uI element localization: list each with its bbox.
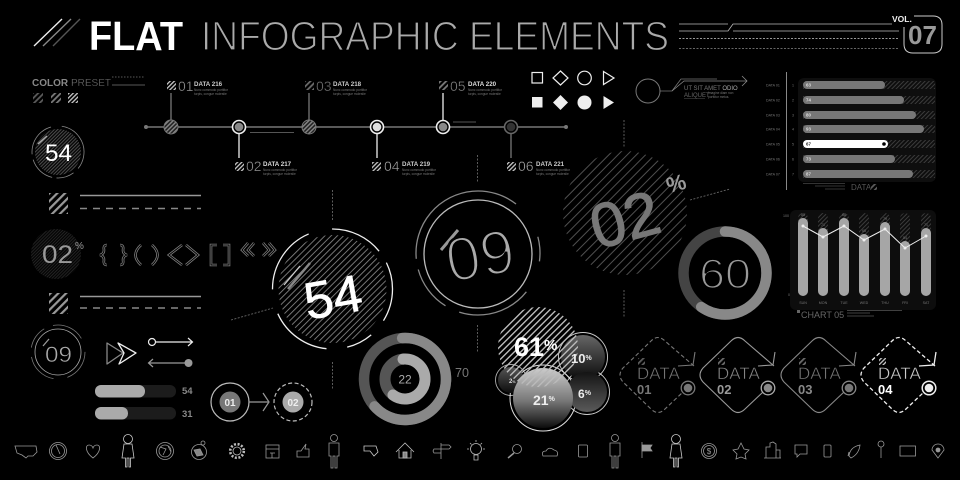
icon: signpost	[433, 443, 451, 459]
icon: magnifier	[508, 444, 522, 458]
timeline label 03	[305, 78, 368, 96]
timeline label 02: Nunc commodo porttitor	[263, 168, 298, 172]
color preset: PRESET	[71, 78, 111, 89]
horizontal bar chart: 4	[792, 128, 794, 132]
timeline label 01: 01	[178, 78, 194, 94]
icon: cloud	[542, 448, 558, 456]
bubble chart: 6	[578, 387, 585, 401]
data card 01	[620, 338, 695, 412]
step flow 01 to 02: 01	[224, 398, 236, 409]
column chart: SUN	[799, 301, 807, 305]
timeline label 04: 04	[384, 158, 400, 174]
data card 01: DATA	[637, 364, 680, 383]
play icon	[107, 343, 136, 364]
icon: map marker	[932, 444, 944, 458]
volume badge	[679, 14, 942, 53]
icon: globe with pin	[192, 441, 206, 460]
horizontal bar chart: 80	[806, 112, 811, 118]
progress bars: 31	[182, 409, 193, 420]
horizontal bar chart: DATA 01	[766, 84, 780, 88]
progress bars: 54	[182, 386, 193, 397]
timeline label 03: DATA 218	[333, 81, 362, 88]
bubble chart: %	[585, 390, 592, 397]
timeline label 03: turpis, congue molestie	[333, 92, 366, 96]
icon: usa map	[15, 446, 37, 458]
title: FLAT	[89, 13, 183, 59]
icon: building	[266, 445, 279, 458]
badge: 02 percent small: 02	[42, 241, 73, 269]
callout arrow: Imagine diam non	[708, 91, 734, 95]
column chart: 100	[783, 214, 789, 218]
icon: heart	[86, 445, 100, 458]
icon: dollar coin	[702, 444, 716, 458]
icon: phone	[824, 445, 831, 457]
timeline label 04: DATA 219	[402, 161, 431, 168]
title: INFOGRAPHIC ELEMENTS	[201, 13, 669, 59]
icon: star	[733, 443, 749, 459]
column chart: FRI	[902, 301, 908, 305]
bubble chart: 61	[514, 332, 544, 362]
icon: clock	[50, 442, 66, 460]
divider with hatch 1	[49, 193, 201, 214]
timeline label 06: 06	[518, 158, 534, 174]
data card 03	[781, 338, 856, 412]
callout arrow	[636, 76, 747, 103]
data card 02: 02	[717, 382, 731, 397]
horizontal bar chart: 67	[806, 142, 811, 146]
data card 02: DATA	[717, 364, 760, 383]
timeline label 01: DATA 216	[194, 81, 223, 88]
shape set	[532, 71, 614, 110]
color preset	[32, 77, 145, 103]
timeline label 03: Nunc commodo porttitor	[333, 88, 368, 92]
callout arrow: porttitor metus.	[708, 95, 729, 99]
icon: man	[329, 434, 339, 468]
icon: gear	[230, 444, 244, 458]
data card 04: DATA	[878, 364, 921, 383]
horizontal bar chart: 87	[806, 172, 811, 176]
volume badge: 07	[908, 20, 937, 50]
data card 01: 01	[637, 382, 651, 397]
badge: 02 percent small: %	[75, 241, 84, 252]
donut: 60: 60	[699, 250, 751, 297]
column chart: 85	[801, 213, 805, 217]
column chart: THU	[881, 301, 889, 305]
big badge: 02 percent: %	[663, 169, 689, 198]
double donut: 22 and 70	[361, 335, 469, 423]
icon: house	[396, 443, 414, 458]
column chart: 0	[788, 293, 790, 297]
horizontal bar chart: 93	[806, 126, 811, 132]
timeline label 01: Nunc commodo porttitor	[194, 88, 229, 92]
timeline label 06: Nunc commodo porttitor	[536, 168, 571, 172]
icon: speech bubble	[795, 445, 807, 457]
step flow 01 to 02	[211, 383, 312, 421]
double donut: 22 and 70: 70	[455, 366, 469, 380]
timeline label 03: 03	[316, 78, 332, 94]
big badge: 54: 54	[300, 264, 367, 332]
timeline label 05: Nunc commodo porttitor	[468, 88, 503, 92]
big badge: 02 percent	[563, 151, 689, 275]
step flow 01 to 02: 02	[287, 398, 299, 409]
badge: 54 small: 54	[45, 140, 72, 167]
horizontal bar chart: 7	[792, 172, 794, 176]
column chart: WED	[860, 301, 869, 305]
horizontal bar chart: DATA 05	[766, 142, 780, 146]
bubble chart: %	[585, 355, 592, 362]
icon: woman 2	[670, 434, 682, 467]
icon: tablet	[578, 445, 588, 457]
arrow pair	[148, 338, 192, 367]
volume badge: VOL.	[892, 14, 912, 24]
icon: pin	[878, 441, 884, 458]
column chart: SAT	[923, 301, 930, 305]
icon: dollar coin: $	[707, 447, 712, 456]
badge: 09 small	[27, 321, 89, 383]
icon: globe	[156, 442, 174, 460]
bubble chart: 10	[571, 351, 585, 366]
bubble chart: %	[544, 337, 557, 354]
title slashes	[34, 19, 80, 46]
big badge: 02 percent: 02	[583, 178, 667, 263]
column chart: TUE	[840, 301, 848, 305]
dashed guides	[231, 120, 730, 390]
timeline label 06	[507, 158, 571, 176]
icon: rocket	[848, 445, 860, 458]
column chart: 71	[924, 223, 928, 227]
timeline label 06: turpis, congue molestie	[536, 172, 569, 176]
timeline label 05: 05	[450, 78, 466, 94]
big badge: 54	[272, 229, 392, 349]
icon: laptop	[900, 446, 916, 456]
icon: woman	[122, 434, 134, 467]
callout arrow: UT SIT AMET ODIO	[684, 86, 738, 92]
big badge: 09: 09	[440, 217, 520, 296]
timeline label 01: turpis, congue molestie	[194, 92, 227, 96]
timeline label 02	[235, 158, 298, 176]
timeline label 04: turpis, congue molestie	[402, 172, 435, 176]
horizontal bar chart: DATA 03	[766, 114, 780, 118]
horizontal bar chart: 6	[792, 158, 794, 162]
horizontal bar chart: 5	[792, 142, 794, 146]
horizontal bar chart: 74	[806, 98, 811, 102]
divider with hatch 2	[49, 293, 201, 314]
bubble chart: 2%	[509, 379, 516, 385]
icon: flag	[642, 442, 652, 458]
column chart	[783, 210, 936, 320]
horizontal bar chart	[766, 72, 936, 192]
icon: hand	[297, 444, 309, 457]
timeline label 05	[439, 78, 503, 96]
horizontal bar chart: 2	[792, 98, 794, 102]
horizontal bar chart: DATA	[851, 183, 872, 192]
timeline label 04: Nunc commodo porttitor	[402, 168, 437, 172]
horizontal bar chart: DATA 06	[766, 158, 780, 162]
icon row	[15, 434, 944, 468]
column chart: 65	[862, 229, 866, 233]
horizontal bar chart: DATA 04	[766, 128, 780, 132]
callout arrow: ALIQUET	[684, 93, 710, 99]
horizontal bar chart: 1	[792, 84, 794, 88]
color preset: COLOR	[32, 78, 69, 89]
badge: 02 percent small	[31, 229, 84, 279]
horizontal bar chart: 63	[806, 82, 811, 88]
bracket icons	[100, 243, 275, 265]
timeline label 05: DATA 220	[468, 81, 497, 88]
bubble chart: 21	[533, 392, 549, 408]
icon: light bulb	[467, 440, 485, 460]
bubble chart: %	[549, 396, 556, 403]
timeline label 05: turpis, congue molestie	[468, 92, 501, 96]
data card 02	[700, 338, 775, 412]
horizontal bar chart: DATA 02	[766, 98, 780, 102]
column chart: 54	[903, 236, 907, 240]
timeline label 04	[372, 158, 437, 176]
icon: city	[764, 442, 781, 458]
column chart: CHART 05	[801, 310, 844, 320]
data card 03: 03	[798, 382, 812, 397]
icon: man 2	[610, 434, 620, 468]
donut: 60	[684, 232, 766, 314]
icon: megaphone	[364, 446, 378, 456]
bubble chart	[496, 307, 610, 431]
double donut: 22 and 70: 22	[398, 372, 412, 386]
timeline	[144, 78, 571, 176]
horizontal bar chart: 3	[792, 114, 794, 118]
data card 04: 04	[878, 382, 893, 397]
data card 03: DATA	[798, 364, 841, 383]
horizontal bar chart: DATA 07	[766, 172, 780, 176]
column chart: 71	[821, 223, 825, 227]
timeline label 02: 02	[246, 158, 262, 174]
progress bars	[95, 385, 193, 420]
timeline label 02: DATA 217	[263, 161, 292, 168]
timeline label 01	[167, 78, 229, 96]
badge: 09 small: 09	[45, 342, 72, 367]
column chart: 88	[842, 213, 846, 217]
column chart: MON	[819, 301, 828, 305]
badge: 54 small	[28, 122, 88, 182]
timeline label 06: DATA 221	[536, 161, 565, 168]
timeline label 02: turpis, congue molestie	[263, 172, 296, 176]
big badge: 09	[411, 186, 545, 320]
column chart: 79	[883, 217, 887, 221]
horizontal bar chart: 73	[806, 156, 811, 162]
data card 04	[861, 338, 936, 412]
